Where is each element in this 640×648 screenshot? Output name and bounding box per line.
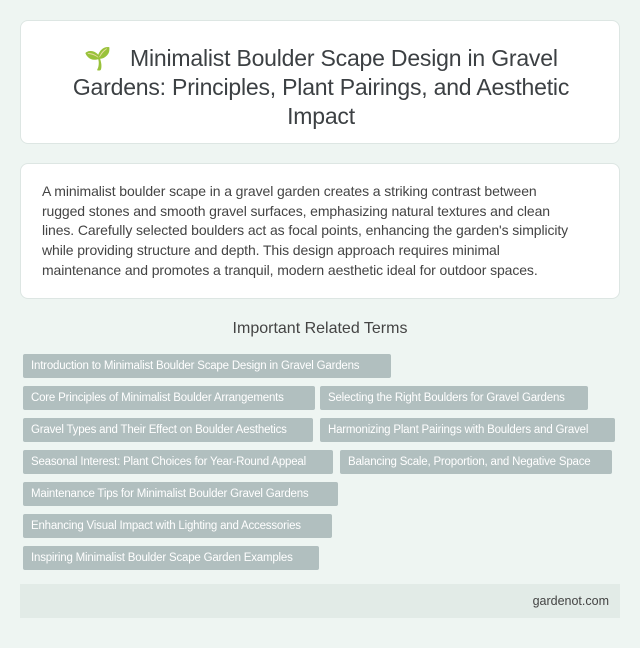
tag [23,482,338,506]
heading: related terms: Important Related Terms [233,320,407,337]
tag: Seasonal Interest: Plant Choices for Year-Round Appeal [31,456,306,468]
footer [20,584,620,618]
tag [320,418,615,442]
tag [340,450,612,474]
tag [23,418,313,442]
footer text: gardenot.com [533,594,609,608]
tag [23,450,333,474]
tag [23,386,315,410]
tag: Enhancing Visual Impact with Lighting and Accessories [31,520,301,532]
description text: rugged stones and smooth gravel surfaces, emphasizing natural textures and clean [42,203,550,219]
description text: while providing structure and depth. This design approach requires minimal [42,242,500,258]
description text: A minimalist boulder scape in a gravel garden creates a striking contrast between [42,183,537,199]
tags [23,354,615,570]
tag: Harmonizing Plant Pairings with Boulders and Gravel [328,424,588,436]
title: Gardens: Principles, Plant Pairings, and Aesthetic [73,74,569,100]
tag: Selecting the Right Boulders for Gravel Gardens [328,392,565,404]
description text: maintenance and promotes a tranquil, modern aesthetic ideal for outdoor spaces. [42,262,538,278]
tag [23,514,332,538]
title card [20,20,620,144]
tag: Core Principles of Minimalist Boulder Arrangements [31,392,284,404]
description card [20,163,620,299]
tag: Gravel Types and Their Effect on Boulder Aesthetics [31,424,287,436]
tag [320,386,588,410]
description text [42,183,568,278]
tag: Introduction to Minimalist Boulder Scape Design in Gravel Gardens [31,360,359,372]
title: Impact [287,103,355,129]
description text: lines. Carefully selected boulders act as focal points, enhancing the garden's simplicity [42,222,568,238]
tag [23,546,319,570]
tag: Balancing Scale, Proportion, and Negative Space [348,456,590,468]
tag: Inspiring Minimalist Boulder Scape Garden Examples [31,552,293,564]
tag: Maintenance Tips for Minimalist Boulder Gravel Gardens [31,488,308,500]
title: 🌱 Minimalist Boulder Scape Design in Gravel [84,41,558,73]
tag [23,354,391,378]
title [73,41,569,129]
